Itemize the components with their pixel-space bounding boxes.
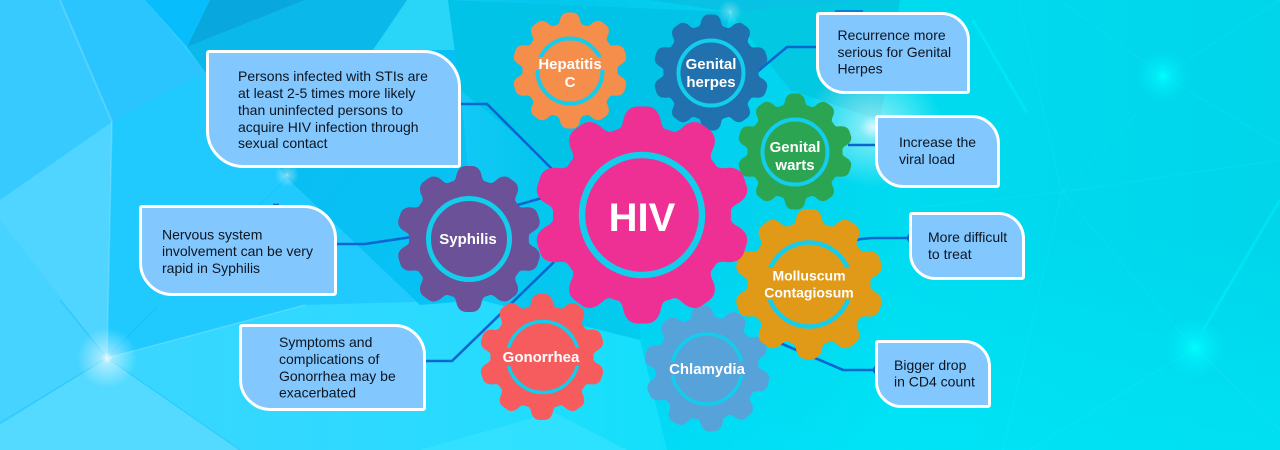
callout: STI risk: sexual contact (238, 135, 328, 151)
callout: Genital herpes: Recurrence more (838, 27, 946, 43)
gear: Hepatitis C (510, 13, 630, 129)
callout: Genital warts (876, 116, 998, 186)
callout: Genital herpes (818, 14, 968, 92)
callout: Chlamydia: in CD4 count (894, 374, 975, 390)
callout: Gonorrhea: Symptoms and (279, 334, 372, 350)
gear: Genital herpes: Genital (686, 56, 736, 73)
callout: Molluscum: More difficult (928, 229, 1007, 245)
callout: Syphilis: rapid in Syphilis (162, 260, 260, 276)
callout: Genital herpes: serious for Genital (838, 44, 951, 60)
gear: Chlamydia: Chlamydia (669, 361, 746, 378)
callout: STI risk: at least 2-5 times more likely (238, 85, 415, 101)
callout: STI risk: than uninfected persons to (238, 102, 403, 118)
callout: Syphilis: Nervous system (162, 226, 262, 242)
callout: Chlamydia: Bigger drop (894, 357, 967, 373)
callout: Genital warts: Increase the (899, 134, 976, 150)
callout: STI risk: acquire HIV infection through (238, 119, 419, 135)
callout: Gonorrhea (240, 326, 424, 410)
gear: Syphilis: Syphilis (439, 231, 497, 248)
callout: Genital warts: viral load (899, 151, 955, 167)
callout: Molluscum (910, 214, 1024, 278)
gear: Molluscum Contagiosum (732, 209, 886, 359)
gear: Genital warts (735, 94, 855, 210)
gear: HIV centre: HIV (609, 196, 676, 240)
callout: Gonorrhea: exacerbated (279, 384, 356, 400)
callout: Gonorrhea: Gonorrhea may be (279, 368, 396, 384)
gear: Genital herpes (651, 15, 771, 131)
gear: Molluscum Contagiosum: Molluscum (772, 268, 846, 284)
gear: Gonorrhea: Gonorrhea (503, 349, 580, 366)
gear: Genital warts: Genital (770, 139, 820, 156)
gear: Chlamydia (637, 300, 777, 437)
callout: Chlamydia (876, 342, 990, 406)
gear: Hepatitis C: C (565, 74, 576, 91)
connector lines (273, 11, 910, 376)
callout: STI risk: Persons infected with STIs are (238, 68, 428, 84)
gear: HIV centre (530, 106, 754, 324)
callout: Syphilis (140, 206, 336, 294)
callout: Syphilis: involvement can be very (162, 243, 313, 259)
callout: Molluscum: to treat (928, 246, 972, 262)
callout: STI risk (208, 52, 460, 166)
gear: Syphilis (394, 166, 544, 312)
gear: Genital herpes: herpes (686, 74, 736, 91)
gear: Hepatitis C: Hepatitis (538, 56, 602, 73)
gear: Genital warts: warts (774, 157, 815, 174)
callout: Gonorrhea: complications of (279, 351, 379, 367)
gear: Molluscum Contagiosum: Contagiosum (764, 284, 854, 300)
callout: Genital herpes: Herpes (838, 60, 883, 76)
gear: Gonorrhea (477, 294, 607, 420)
